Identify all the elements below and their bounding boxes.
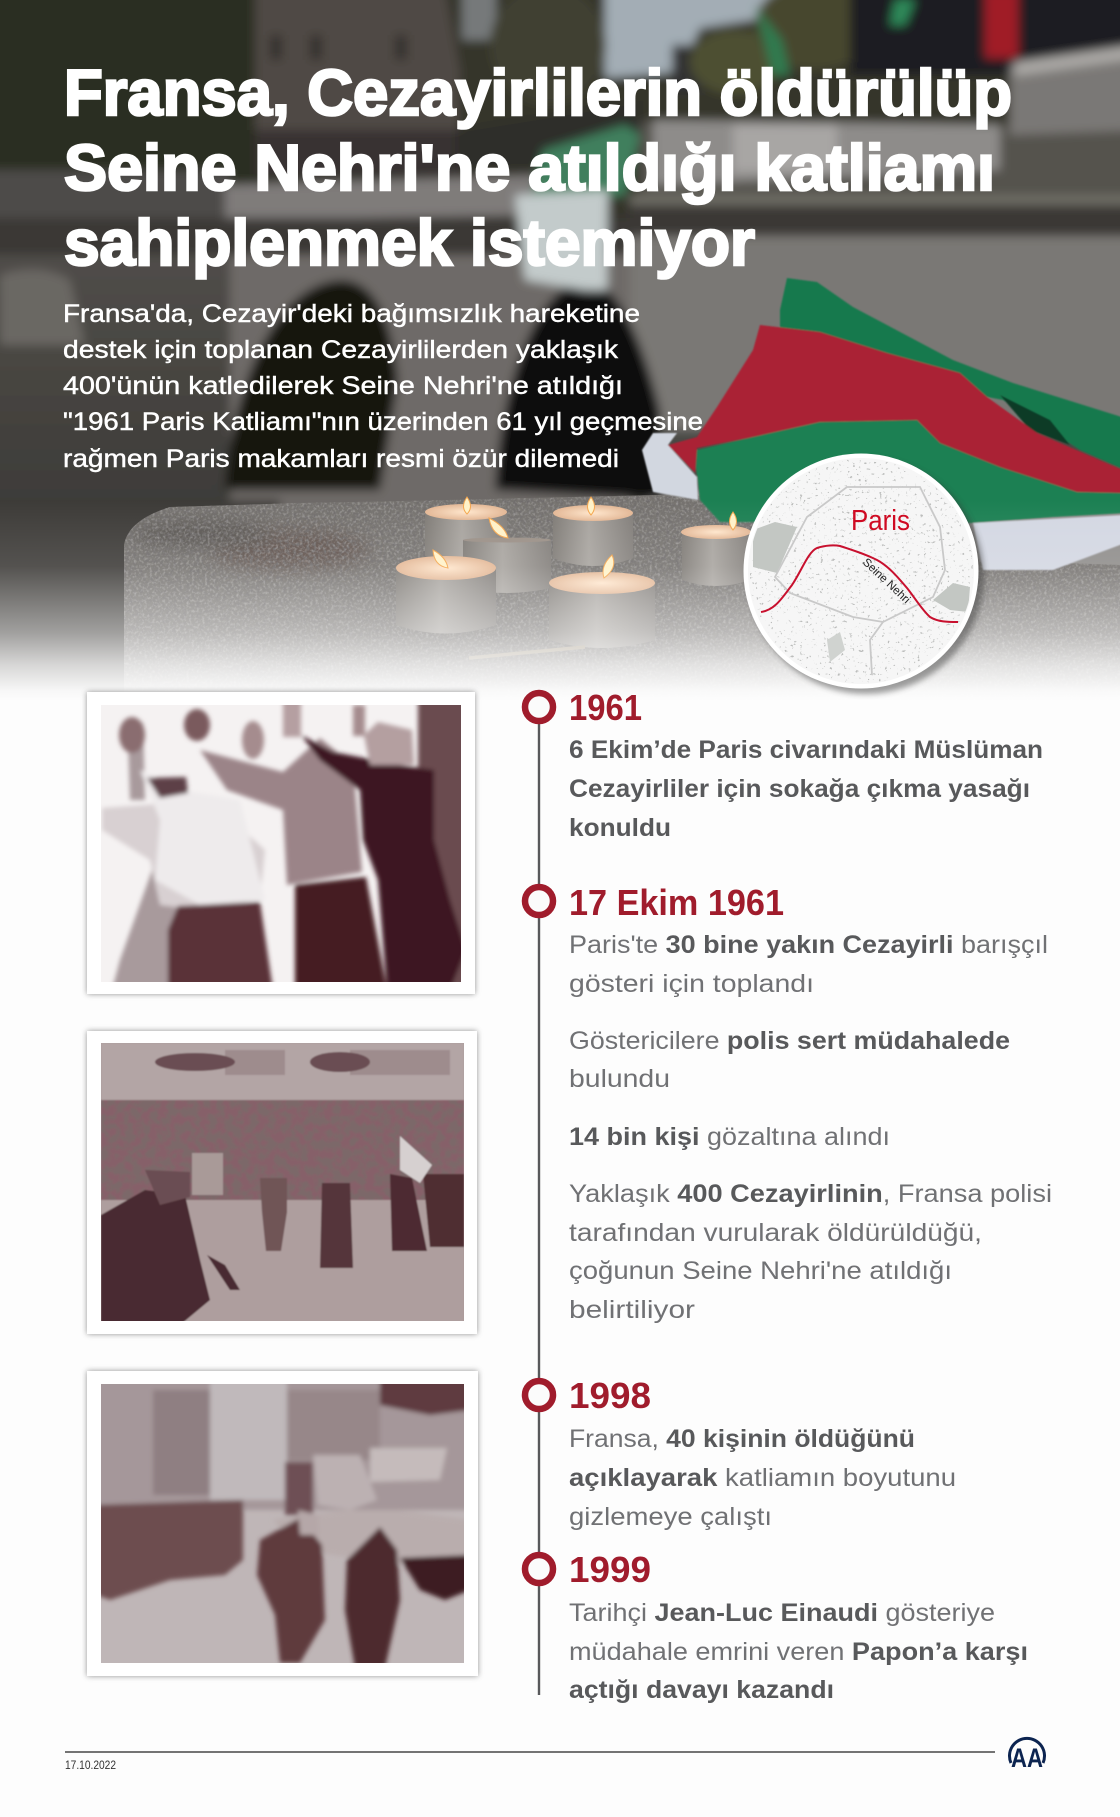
timeline entry: 1998: gizlemeye çalıştı bbox=[569, 1503, 772, 1531]
timeline entry: 17 Ekim 1961: 17 Ekim 1961 bbox=[569, 882, 784, 923]
arches bbox=[225, 280, 398, 490]
timeline entry: 17 Ekim 1961: Göstericilere polis sert müdahalede bbox=[569, 1027, 1010, 1055]
timeline entry: 1999: müdahale emrini veren Papon’a karşı bbox=[569, 1638, 1028, 1666]
stone block bbox=[124, 490, 1120, 700]
photo 3: soldiers and tank bbox=[87, 1371, 478, 1676]
timeline entry: 17 Ekim 1961: çoğunun Seine Nehri'ne atıldığı bbox=[569, 1257, 952, 1285]
timeline entry: 17 Ekim 1961 bbox=[525, 882, 1052, 1324]
photo 1: men against the wall bbox=[87, 692, 475, 994]
green lower band bbox=[696, 420, 1120, 523]
title: sahiplenmek istemiyor bbox=[64, 206, 755, 279]
matchstick bbox=[469, 647, 585, 658]
candle far right bbox=[681, 512, 751, 586]
hanging flag bbox=[530, 125, 640, 205]
timeline entry: 1999: Tarihçi Jean-Luc Einaudi gösteriye bbox=[569, 1599, 995, 1627]
bridge left bbox=[0, 170, 230, 220]
timeline entry: 1961 bbox=[525, 687, 1043, 842]
timeline entry: 1961: 1961 bbox=[569, 687, 642, 728]
subtitle text block: 400'ünün katledilerek Seine Nehri'ne atıldığı bbox=[63, 372, 623, 400]
candle front right bbox=[549, 555, 655, 648]
subtitle text block bbox=[63, 300, 703, 473]
sky bbox=[605, 0, 795, 78]
timeline entry: 1961: Cezayirliler için sokağa çıkma yasağı bbox=[569, 775, 1030, 803]
title: Seine Nehri'ne atıldığı katliamı bbox=[64, 131, 995, 204]
timeline entry: 17 Ekim 1961: Yaklaşık 400 Cezayirlinin , Fransa polisi bbox=[569, 1180, 1052, 1208]
date: 17.10.2022 bbox=[65, 1758, 116, 1772]
timeline entry: 17 Ekim 1961: bulundu bbox=[569, 1065, 670, 1093]
subtitle text block: rağmen Paris makamları resmi özür dilemedi bbox=[63, 445, 619, 473]
title: Fransa, Cezayirlilerin öldürülüp bbox=[64, 56, 1012, 129]
timeline entry: 1961: konuldu bbox=[569, 814, 671, 842]
candle far left bbox=[425, 497, 507, 563]
timeline entry: 1998 bbox=[525, 1375, 956, 1531]
river Seine bbox=[761, 545, 958, 622]
timeline entry: 1998: 1998 bbox=[569, 1375, 651, 1416]
timeline entry: 17 Ekim 1961: belirtiliyor bbox=[569, 1296, 695, 1324]
timeline entry: 1998: açıklayarak katliamın boyutunu bbox=[569, 1464, 956, 1492]
timeline entry: 17 Ekim 1961: tarafından vurularak öldürüldüğü, bbox=[569, 1219, 982, 1247]
icon: AA logo: AA bbox=[1011, 1743, 1043, 1773]
candles bbox=[396, 497, 751, 658]
title bbox=[64, 56, 1012, 279]
footer rule bbox=[65, 1751, 995, 1753]
subtitle text block: destek için toplanan Cezayirlilerden yaklaşık bbox=[63, 336, 619, 364]
timeline entry: 1999: açtığı davayı kazandı bbox=[569, 1676, 834, 1704]
building bbox=[255, 0, 460, 130]
subtitle text block: Fransa'da, Cezayir'deki bağımsızlık hareketine bbox=[63, 300, 640, 328]
timeline entry: 17 Ekim 1961: gösteri için toplandı bbox=[569, 970, 814, 998]
candle centre bbox=[463, 518, 551, 593]
Paris map circle bbox=[744, 454, 984, 694]
candle front left bbox=[396, 550, 496, 634]
candle far middle bbox=[553, 497, 633, 566]
timeline entry: 1999: 1999 bbox=[569, 1549, 651, 1590]
timeline axis bbox=[538, 707, 540, 1695]
timeline entry: 17 Ekim 1961: Paris'te 30 bine yakın Cezayirli barışçıl bbox=[569, 931, 1048, 959]
red band bbox=[668, 325, 1120, 493]
label: Paris: Paris bbox=[851, 505, 910, 537]
subtitle text block: "1961 Paris Katliamı"nın üzerinden 61 yıl geçmesine bbox=[63, 408, 703, 436]
white cloth right bbox=[973, 515, 1120, 570]
white cloth left bbox=[642, 433, 698, 500]
timeline entry: 17 Ekim 1961: 14 bin kişi gözaltına alındı bbox=[569, 1123, 890, 1151]
timeline entry: 1998: Fransa, 40 kişinin öldüğünü bbox=[569, 1425, 915, 1453]
photo 2: crowd and soldier bbox=[87, 1031, 477, 1334]
label: Seine Nehri: Seine Nehri bbox=[860, 556, 912, 606]
timeline entry: 1961: 6 Ekim’de Paris civarındaki Müslüman bbox=[569, 736, 1043, 764]
green upper fold bbox=[780, 278, 1120, 470]
bridge right: parapet, corbels and wall bbox=[635, 118, 1120, 196]
timeline entry: 1999 bbox=[525, 1549, 1028, 1704]
flag bbox=[642, 278, 1120, 570]
hero photo: candles and flag on the Seine bridge bbox=[0, 0, 1120, 740]
fade to paper bbox=[0, 520, 1120, 700]
